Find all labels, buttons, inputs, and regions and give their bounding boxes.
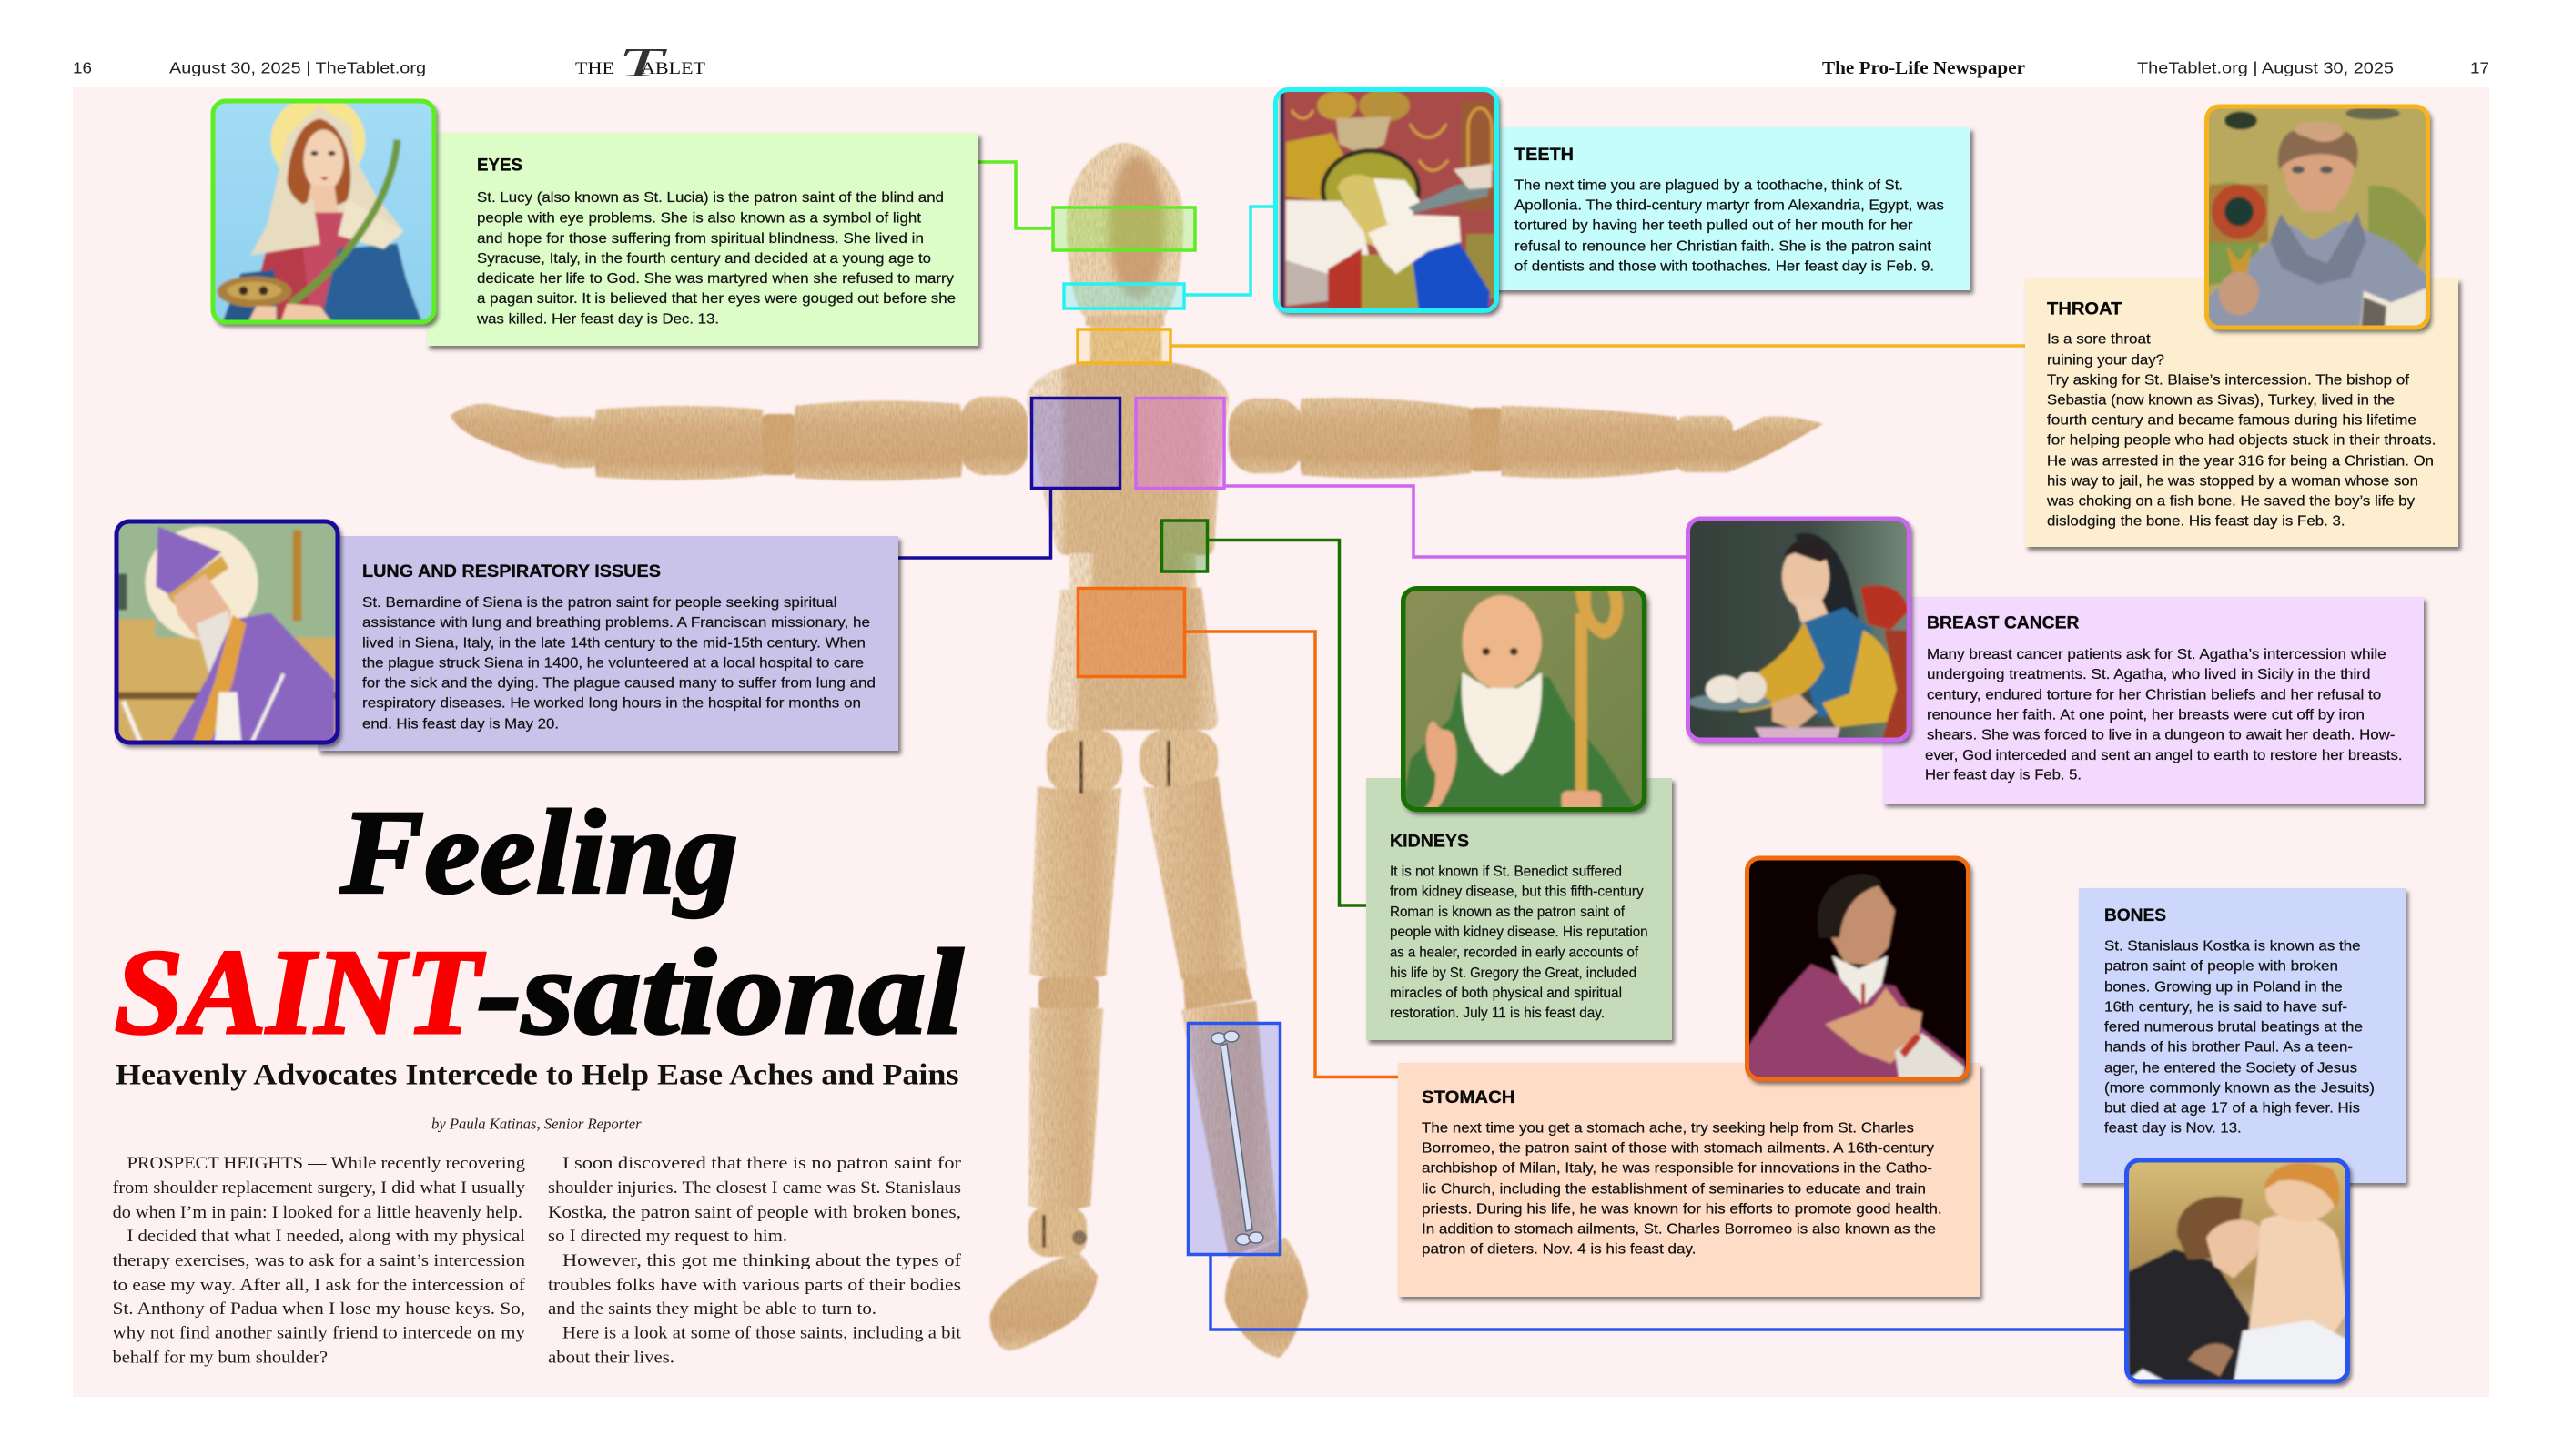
header: The Tablet logo: ABLET (641, 59, 705, 78)
breast cancer text: undergoing treatments. St. Agatha, who lived in Sicily in the third (1927, 667, 2370, 682)
article column 2: I soon discovered that there is no patron saint for (562, 1155, 961, 1173)
header: right date and folio: 17 (2470, 58, 2489, 76)
article column 1: therapy exercises, was to ask for a saint’s intercession (113, 1252, 525, 1270)
throat text: was choking on a fish bone. He saved the boy’s life by (2046, 493, 2415, 510)
article column 2: Here is a look at some of those saints, including a bit (562, 1325, 962, 1343)
throat text: for helping people who had objects stuck in their throats. (2047, 433, 2436, 448)
article column 1: from shoulder replacement surgery, I did what I usually (113, 1179, 526, 1198)
eyes text (476, 190, 956, 328)
teeth heading: TEETH (1514, 146, 1574, 165)
lung text: lived in Siena, Italy, in the late 14th century to the mid-15th century. When (362, 636, 866, 652)
lung text: assistance with lung and breathing problems. A Franciscan missionary, he (362, 615, 870, 631)
bones text (2104, 939, 2375, 1136)
article column 2: about their lives. (548, 1349, 674, 1367)
portrait: St. Charles Borromeo (1745, 855, 1970, 1081)
eyes text: was killed. Her feast day is Dec. 13. (476, 312, 719, 328)
throat text: Is a sore throat (2047, 331, 2151, 348)
highlight box: throat (1078, 329, 1170, 363)
panel: teeth (1273, 87, 1970, 313)
bones text: bones. Growing up in Poland in the (2104, 979, 2343, 996)
stomach card (1398, 1063, 1980, 1297)
title: SAINT-sational (115, 925, 964, 1059)
panel: kidneys (1366, 586, 1672, 1040)
teeth text: Apollonia. The third-century martyr from Alexandria, Egypt, was (1514, 197, 1944, 213)
highlight box: bones with bone icon (1189, 1023, 1280, 1254)
eyes text: St. Lucy (also known as St. Lucia) is the patron saint of the blind and (477, 190, 944, 206)
teeth text (1514, 177, 1944, 274)
bones text: St. Stanislaus Kostka is known as the (2104, 939, 2361, 954)
article column 2: However, this got me thinking about the types of (562, 1252, 962, 1270)
bones text: feast day is Nov. 13. (2104, 1121, 2242, 1136)
lung text: respiratory diseases. He worked long hours in the hospital for months on (362, 696, 861, 712)
mannequin left leg (990, 730, 1122, 1350)
bones text: ager, he entered the Society of Jesus (2104, 1061, 2357, 1076)
throat card (2025, 278, 2458, 547)
teeth text: The next time you are plagued by a toothache, think of St. (1514, 177, 1903, 193)
connector: stomach (1186, 632, 1399, 1077)
connector: lungs (898, 489, 1050, 558)
portrait: St. Bernardine of Siena (115, 519, 340, 744)
article column 1: to ease my way. After all, I ask for the intercession of (113, 1277, 526, 1295)
teeth text: tortured by having her teeth pulled out of her mouth for her (1514, 217, 1913, 233)
stomach text: Borromeo, the patron saint of those with stomach ailments. A 16th-century (1422, 1141, 1934, 1156)
throat text: fourth century and became famous during his lifetime (2047, 413, 2416, 428)
highlight box: eyes (1053, 207, 1195, 250)
eyes text: dedicate her life to God. She was martyred when she refused to marry (477, 271, 954, 287)
connector: throat (1171, 344, 2026, 348)
eyes heading: EYES (477, 157, 522, 176)
portrait: St. Agatha (1686, 517, 1911, 743)
article column 2: and the saints they might be able to turn to. (548, 1300, 876, 1319)
article column 2: so I directed my request to him. (548, 1228, 787, 1246)
article column 1 (113, 1155, 526, 1367)
stomach heading: STOMACH (1422, 1088, 1514, 1107)
article column 1: why not find another saintly friend to intercede on my (113, 1325, 526, 1343)
title: Feeling: Feeling (339, 785, 738, 919)
panel: eyes (211, 95, 978, 346)
highlight box: stomach (1078, 588, 1185, 677)
article column 2: Kostka, the patron saint of people with broken bones, (548, 1204, 961, 1222)
eyes text: and hope for those suffering from spiritual blindness. She lived in (477, 231, 924, 247)
wooden mannequin figure (451, 143, 1823, 1358)
portrait: St. Blaise (2204, 104, 2430, 329)
breast cancer text: Her feast day is Feb. 5. (1925, 768, 2082, 784)
title: SAINT-sational: -sational (477, 925, 964, 1059)
portrait: St. Lucy (211, 95, 437, 324)
lung text: end. His feast day is May 20. (362, 717, 559, 733)
header: The Tablet logo: T (619, 39, 668, 86)
article column 1: I decided that what I needed, along with my physical (127, 1228, 525, 1246)
breast cancer text: shears. She was forced to live in a dungeon to await her death. How- (1927, 728, 2395, 743)
highlight box: teeth (1064, 284, 1184, 308)
mannequin left arm (451, 397, 1028, 480)
breast cancer text: renounce her faith. At one point, her breasts were cut off by iron (1927, 708, 2365, 723)
lung text: St. Bernardine of Siena is the patron saint for people seeking spiritual (362, 595, 837, 611)
kidneys text: restoration. July 11 is his feast day. (1390, 1006, 1605, 1021)
byline: by Paula Katinas, Senior Reporter (431, 1116, 642, 1133)
lung text (362, 595, 876, 733)
throat text (2046, 331, 2436, 530)
bones text: (more commonly known as the Jesuits) (2104, 1081, 2375, 1096)
article column 1: PROSPECT HEIGHTS — While recently recovering (127, 1155, 525, 1173)
breast cancer text: Many breast cancer patients ask for St. Agatha’s intercession while (1927, 647, 2386, 662)
connector: bones (1211, 1256, 2125, 1330)
highlight box: kidneys (1161, 521, 1207, 571)
teeth card (1493, 127, 1970, 290)
panel: throat (2025, 104, 2458, 547)
connector: teeth (1185, 207, 1274, 295)
highlight box: breast (1136, 399, 1224, 488)
stomach text (1422, 1121, 1942, 1258)
mannequin right leg (1140, 730, 1308, 1358)
kidneys text: as a healer, recorded in early accounts of (1390, 945, 1639, 961)
article column 1: do when I’m in pain: I looked for a little heavenly help. (113, 1204, 522, 1222)
portrait: St. Apollonia (1273, 87, 1499, 313)
portrait: St. Benedict (1401, 586, 1646, 812)
panel: bones (2079, 888, 2406, 1383)
connector: eyes (978, 162, 1051, 228)
mannequin right arm (1229, 398, 1823, 479)
kidneys text: Roman is known as the patron saint of (1390, 905, 1626, 920)
header: The Pro-Life Newspaper tagline: The Pro-Life Newspaper (1822, 58, 2025, 78)
breast cancer text: ever, God interceded and sent an angel to earth to restore her breasts. (1925, 748, 2403, 763)
header: left folio and date: 16 (73, 58, 92, 76)
article column 1: behalf for my bum shoulder? (113, 1349, 328, 1367)
kidneys text: from kidney disease, but this fifth-century (1390, 885, 1644, 900)
breast cancer card (1883, 597, 2424, 804)
portrait: St. Stanislaus Kostka (2124, 1158, 2350, 1383)
bones text: patron saint of people with broken (2104, 959, 2338, 974)
connector: breast (1225, 486, 1687, 557)
stomach text: priests. During his life, he was known for his efforts to promote good health. (1422, 1201, 1942, 1218)
article column 1: St. Anthony of Padua when I lose my house keys. So, (113, 1300, 525, 1319)
kidneys heading: KIDNEYS (1390, 832, 1469, 852)
breast cancer heading: BREAST CANCER (1927, 614, 2080, 633)
kidneys text: miracles of both physical and spiritual (1390, 986, 1622, 1001)
teeth text: refusal to renounce her Christian faith. She is the patron saint (1514, 238, 1932, 254)
header: right date and folio: TheTablet.org | August 30, 2025 (2137, 58, 2394, 76)
stomach text: archbishop of Milan, Italy, he was responsible for innovations in the Catho- (1422, 1161, 1932, 1176)
throat heading: THROAT (2047, 299, 2122, 318)
title: SAINT-sational: SAINT (115, 925, 486, 1059)
bones text: fered numerous brutal beatings at the (2104, 1019, 2363, 1036)
icon: bone (1211, 1031, 1263, 1245)
stomach text: lic Church, including the establishment of seminaries to educate and train (1422, 1181, 1926, 1198)
throat text: Try asking for St. Blaise’s intercession. The bishop of (2047, 373, 2410, 388)
subtitle: Heavenly Advocates Intercede to Help Ease Aches and Pains (116, 1059, 959, 1092)
teeth text: of dentists and those with toothaches. Her feast day is Feb. 9. (1514, 258, 1934, 274)
bones text: 16th century, he is said to have suf- (2104, 999, 2347, 1016)
header: left folio and date: August 30, 2025 | TheTablet.org (169, 58, 426, 76)
throat text: Sebastia (now known as Sivas), Turkey, lived in the (2047, 393, 2395, 408)
stomach text: The next time you get a stomach ache, try seeking help from St. Charles (1422, 1121, 1914, 1136)
panel: stomach (1398, 855, 1980, 1297)
kidneys text (1390, 864, 1648, 1021)
lung text: the plague struck Siena in 1400, he volunteered at a local hospital to care (362, 656, 864, 672)
article column 2: troubles folks have with various parts of their bodies (548, 1277, 961, 1295)
throat text: dislodging the bone. His feast day is Feb. 3. (2047, 513, 2345, 530)
kidneys text: It is not known if St. Benedict suffered (1390, 864, 1622, 879)
kidneys card (1366, 778, 1672, 1040)
lung text: for the sick and the dying. The plague caused many to suffer from lung and (362, 676, 876, 692)
eyes text: a pagan suitor. It is believed that her eyes were gouged out before she (477, 291, 956, 307)
panel: breast cancer (1686, 517, 2424, 804)
throat text: ruining your day? (2047, 353, 2164, 368)
header: left folio and date (73, 58, 426, 76)
stomach text: patron of dieters. Nov. 4 is his feast day. (1422, 1241, 1697, 1258)
connector: kidneys (1209, 541, 1367, 905)
bones text: but died at age 17 of a high fever. His (2104, 1101, 2360, 1116)
mannequin head and neck (1067, 143, 1183, 369)
highlight box: lungs (1032, 399, 1119, 488)
article column 2: shoulder injuries. The closest I came was St. Stanislaus (548, 1179, 961, 1198)
panel: lung and respiratory issues (115, 519, 898, 751)
header: The Tablet logo (575, 39, 705, 86)
eyes text: Syracuse, Italy, in the fourth century and decided at a young age to (477, 251, 931, 267)
lung card (318, 536, 898, 751)
breast cancer text: century, endured torture for her Christian beliefs and her refusal to (1927, 688, 2381, 703)
throat text: his way to jail, he was stopped by a woman whose son (2047, 473, 2418, 490)
eyes card (427, 133, 978, 346)
header: The Tablet logo: THE (575, 59, 614, 78)
bones card (2079, 888, 2406, 1183)
throat text: He was arrested in the year 316 for being a Christian. On (2047, 453, 2434, 470)
kidneys text: his life by St. Gregory the Great, included (1390, 966, 1636, 981)
bones text: hands of his brother Paul. As a teen- (2104, 1039, 2353, 1056)
header: right date and folio (2137, 58, 2489, 76)
stomach text: In addition to stomach ailments, St. Charles Borromeo is also known as the (1422, 1221, 1936, 1238)
eyes text: people with eye problems. She is also known as a symbol of light (477, 210, 922, 226)
lung heading: LUNG AND RESPIRATORY ISSUES (362, 562, 661, 581)
breast cancer text (1925, 647, 2403, 784)
mannequin torso (1027, 362, 1229, 730)
bones heading: BONES (2104, 906, 2166, 925)
kidneys text: people with kidney disease. His reputation (1390, 925, 1648, 940)
article column 2 (548, 1155, 962, 1367)
